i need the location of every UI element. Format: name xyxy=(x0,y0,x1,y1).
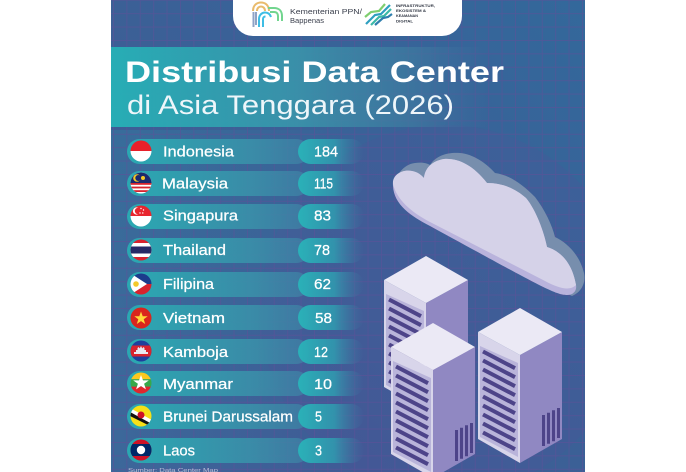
icon: cloud xyxy=(393,153,584,296)
row: Indonesia xyxy=(127,139,364,164)
row: Filipina: Filipina xyxy=(163,276,215,293)
row: Laos xyxy=(127,438,364,463)
ministry name: Kementerian PPN/ xyxy=(290,7,363,16)
row: Kamboja: 12 xyxy=(314,344,328,361)
row: Vietnam: 58 xyxy=(315,310,332,327)
row: Kamboja xyxy=(127,339,364,364)
flag: Indonesia xyxy=(130,140,152,162)
row: Vietnam xyxy=(127,305,364,330)
row: Kamboja: Kamboja xyxy=(163,344,229,361)
row: Thailand xyxy=(127,238,364,263)
row: Filipina xyxy=(127,272,364,297)
row: Brunei Darussalam: Brunei Darussalam xyxy=(163,408,293,426)
icon: front left server xyxy=(391,323,475,472)
row: Indonesia: 184 xyxy=(314,144,338,160)
row: Malaysia xyxy=(127,171,364,196)
row: Laos: 3 xyxy=(315,442,322,460)
subtitle: di Asia Tenggara (2026) xyxy=(127,90,454,120)
flag: Laos xyxy=(130,439,152,461)
row: Myanmar: 10 xyxy=(314,376,332,393)
digital infrastructure label: KEAMANAN xyxy=(396,14,418,18)
row: Brunei Darussalam: 5 xyxy=(315,408,322,426)
flag: Singapura xyxy=(130,205,152,227)
row: Singapura: Singapura xyxy=(163,208,239,224)
row: Laos: Laos xyxy=(163,442,195,460)
title: Distribusi Data Center xyxy=(125,56,504,89)
row: Myanmar xyxy=(127,371,364,396)
digital infrastructure label: EKOSISTEM & xyxy=(396,9,426,13)
flag: Myanmar xyxy=(130,372,152,394)
row: Singapura: 83 xyxy=(314,208,331,224)
panel: background xyxy=(111,0,630,472)
flag: Vietnam xyxy=(130,307,152,329)
row: Malaysia: 115 xyxy=(314,176,333,192)
row: Thailand: 78 xyxy=(314,242,330,259)
row: Thailand: Thailand xyxy=(163,242,226,259)
row: Indonesia: Indonesia xyxy=(163,144,235,160)
row: Malaysia: Malaysia xyxy=(162,176,229,192)
icon: back server xyxy=(384,256,468,411)
icon: digital infrastructure logo xyxy=(365,4,392,25)
row: Vietnam: Vietnam xyxy=(163,310,225,327)
row: Brunei Darussalam xyxy=(127,404,364,429)
flag: Thailand xyxy=(130,239,152,261)
flag: Brunei xyxy=(130,405,152,427)
flag: Kamboja xyxy=(130,340,152,362)
logo header xyxy=(233,0,462,36)
row: Filipina: 62 xyxy=(314,276,331,293)
digital infrastructure label: INFRASTRUKTUR, xyxy=(396,4,435,8)
title banner xyxy=(111,47,504,127)
row: Singapura xyxy=(127,204,364,229)
row: Myanmar: Myanmar xyxy=(163,376,233,393)
icon: front right server xyxy=(478,308,562,463)
flag: Filipina xyxy=(130,273,152,295)
flag: Malaysia xyxy=(130,172,152,194)
digital infrastructure label: DIGITAL xyxy=(396,20,414,24)
ministry name: Bappenas xyxy=(290,16,324,25)
icon: Bappenas logo xyxy=(253,2,282,27)
